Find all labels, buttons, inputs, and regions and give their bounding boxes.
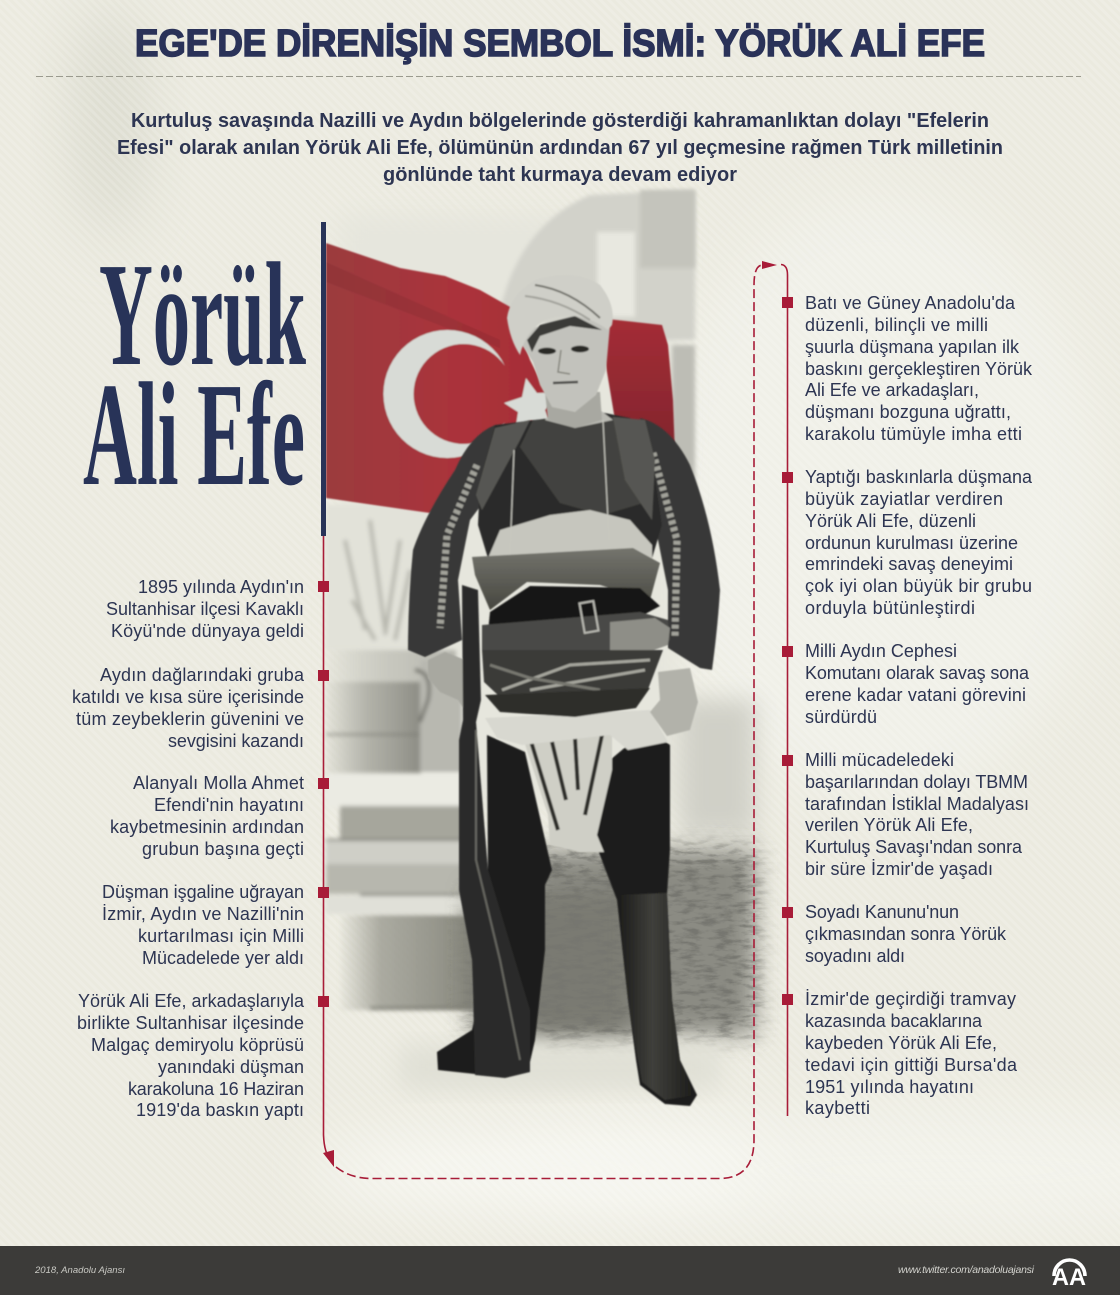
right text: item 6: İzmir'de geçirdiği tramvay	[805, 989, 1016, 1009]
right text: item 4: verilen Yörük Ali Efe,	[805, 815, 973, 835]
intro text: Kurtuluş savaşında Nazilli ve Aydın bölgelerinde gösterdiği kahramanlıktan dolayı "Efelerin	[131, 109, 989, 132]
figure: white sash	[488, 510, 652, 572]
left text: item 5: birlikte Sultanhisar ilçesinde	[77, 1013, 304, 1033]
figure: dark belt opening	[488, 586, 660, 632]
left text: item 2: Aydın dağlarındaki gruba	[100, 665, 305, 685]
big name title: Yörük Ali Efe	[83, 233, 306, 517]
left text: item 4: kurtarılması için Milli	[138, 926, 304, 946]
right text: item 5: çıkmasından sonra Yörük	[805, 924, 1007, 944]
arrow: top right	[762, 261, 777, 269]
intro text	[117, 109, 1003, 186]
left text: item 2: sevgisini kazandı	[168, 731, 304, 751]
figure: leather strap	[482, 601, 670, 655]
right text: item 6: kazasında bacaklarına	[805, 1011, 983, 1031]
left text: item 1: Köyü'nde dünyaya geldi	[111, 621, 304, 641]
figure: left leg and boot	[437, 735, 552, 1074]
right text: item 2: ordunun kurulması üzerine	[805, 533, 1018, 553]
figure: shalwar stripes	[522, 725, 612, 852]
portrait: Yörük Ali Efe figure	[408, 275, 720, 1106]
figure: white cloth	[485, 710, 668, 750]
pot	[326, 650, 462, 788]
right text: item 1: düşmanı bozguna uğrattı,	[805, 402, 1011, 422]
right text: item 6: kaybeden Yörük Ali Efe,	[805, 1033, 997, 1053]
right text: item 3: Milli Aydın Cephesi	[805, 641, 957, 661]
right text: item 5	[805, 902, 1007, 966]
left text: item 1: 1895 yılında Aydın'ın	[138, 577, 304, 597]
figure: right hand	[650, 668, 698, 736]
left text: item 5: Malgaç demiryolu köprüsü	[91, 1035, 304, 1055]
figure: left hand	[428, 652, 480, 722]
figure: mouth	[553, 382, 578, 383]
intro text: Efesi" olarak anılan Yörük Ali Efe, ölümünün ardından 67 yıl geçmesine rağmen Türk milletinin	[117, 136, 1003, 159]
turkish flag	[326, 243, 675, 513]
right text: item 4: başarılarından dolayı TBMM	[805, 772, 1028, 792]
right text: item 6: 1951 yılında hayatını	[805, 1077, 974, 1097]
right text: item 4: Kurtuluş Savaşı'ndan sonra	[805, 837, 1023, 857]
flag star	[504, 378, 560, 432]
right text: item 4: tarafından İstiklal Madalyası	[805, 794, 1029, 814]
left text: item 1: Sultanhisar ilçesi Kavaklı	[106, 599, 304, 619]
footer: credit: 2018, Anadolu Ajansı	[34, 1265, 125, 1276]
left text: item 4: Mücadelede yer aldı	[142, 948, 304, 968]
right text: item 2	[805, 467, 1033, 618]
left text: item 3: Efendi'nin hayatını	[154, 795, 304, 815]
figure: eyes	[538, 346, 589, 354]
right text: item 3: erene kadar vatani görevini	[805, 685, 1026, 705]
right text: item 3	[805, 641, 1030, 727]
wall: right side of figure	[680, 700, 755, 835]
left text: item 4: İzmir, Aydın ve Nazilli'nin	[102, 904, 304, 924]
figure: pouch flap	[472, 548, 660, 610]
right text: item 2: çok iyi olan büyük bir grubu	[805, 576, 1032, 596]
right text: item 1: Ali Efe ve arkadaşları,	[805, 380, 979, 400]
right text: item 3: Komutanı olarak savaş sona	[805, 663, 1030, 683]
right text: item 1: düzenli, bilinçli ve milli	[805, 315, 988, 335]
left text: item 3: grubun başına geçti	[142, 839, 304, 859]
timeline path with arrows	[323, 261, 788, 1178]
right text: item 1	[805, 293, 1033, 444]
figure: lower skirt	[485, 688, 650, 717]
right text: item 5: soyadını aldı	[805, 946, 905, 966]
right bullets	[782, 297, 793, 1005]
right text: item 2: Yaptığı baskınlarla düşmana	[805, 467, 1033, 487]
figure: patterned sash	[482, 650, 663, 697]
figure: right leg and boot	[592, 738, 697, 1106]
left text: item 4: Düşman işgaline uğrayan	[102, 882, 304, 902]
left text: item 5: Yörük Ali Efe, arkadaşlarıyla	[78, 991, 305, 1011]
left text: item 2: tüm zeybeklerin güvenini ve	[76, 709, 304, 729]
intro text: gönlünde taht kurmaya devam ediyor	[383, 163, 737, 186]
right text: item 6: kaybetti	[805, 1098, 870, 1118]
figure: hanging cords	[510, 420, 609, 555]
right text: item 2: büyük zayiatlar verdiren	[805, 489, 1003, 509]
flag crescent	[383, 330, 505, 458]
big name title: Yörük Ali Efe: Yörük	[99, 233, 306, 397]
left text: item 5: karakoluna 16 Haziran	[128, 1079, 304, 1099]
left text: item 2: katıldı ve kısa süre içerisinde	[72, 687, 304, 707]
right text: item 1: Batı ve Güney Anadolu'da	[805, 293, 1016, 313]
big name title: Yörük Ali Efe: Ali Efe	[83, 353, 305, 517]
figure: right sleeve	[640, 418, 720, 670]
arrow: bottom left	[323, 1150, 334, 1167]
right text: item 2: orduyla bütünleştirdi	[805, 598, 975, 618]
navy vertical bar	[321, 222, 326, 536]
right text: item 4: bir süre İzmir'de yaşadı	[805, 859, 993, 879]
left text: item 5	[77, 991, 305, 1120]
right text: item 6: tedavi için gittiği Bursa'da	[805, 1055, 1018, 1075]
right text: item 4: Milli mücadeledeki	[805, 750, 954, 770]
right text: item 6	[805, 989, 1018, 1118]
right text: item 5: Soyadı Kanunu'nun	[805, 902, 959, 922]
right text: item 1: karakolu tümüyle imha etti	[805, 424, 1022, 444]
left text: item 2	[72, 665, 305, 751]
figure: nose	[558, 350, 570, 374]
figure: torso and vest	[478, 412, 662, 565]
right text: item 1: şuurla düşmana yapılan ilk	[805, 337, 1020, 357]
left text: item 5: 1919'da baskın yaptı	[136, 1100, 304, 1120]
photo background: building wall and ground	[326, 190, 755, 1090]
left text: item 3: Alanyalı Molla Ahmet	[133, 773, 304, 793]
figure: neck	[545, 392, 602, 428]
stone stairs	[326, 773, 475, 1010]
pavement shadow	[400, 1045, 720, 1090]
right text: item 1: baskını gerçekleştiren Yörük	[805, 359, 1033, 379]
figure: turban	[507, 275, 613, 355]
footer	[0, 1246, 1120, 1295]
left text: item 3: kaybetmesinin ardından	[110, 817, 304, 837]
figure: face	[522, 315, 610, 412]
figure: left sleeve	[408, 425, 500, 657]
right text: item 4	[805, 750, 1029, 879]
right text: item 2: emrindeki savaş deneyimi	[805, 554, 1013, 574]
wall: upper building	[340, 190, 695, 805]
left text: item 3	[110, 773, 304, 859]
right text: item 3: sürdürdü	[805, 707, 877, 727]
left bullets	[318, 581, 329, 1007]
left text: item 4	[102, 882, 304, 968]
left text: item 1	[106, 577, 304, 641]
figure: rifle	[459, 585, 530, 1078]
figure: right boot shine	[619, 893, 694, 1100]
left text: item 5: yanındaki düşman	[158, 1057, 304, 1077]
plant	[326, 505, 426, 650]
ground	[530, 850, 755, 1035]
icon: AA logo: AA	[1052, 1264, 1086, 1291]
title: EGE'DE DİRENİŞİN SEMBOL İSMİ: YÖRÜK ALİ EFE	[135, 22, 985, 65]
right text: item 2: Yörük Ali Efe, düzenli	[805, 511, 976, 531]
footer: twitter url: www.twitter.com/anadoluajansi	[898, 1264, 1035, 1276]
